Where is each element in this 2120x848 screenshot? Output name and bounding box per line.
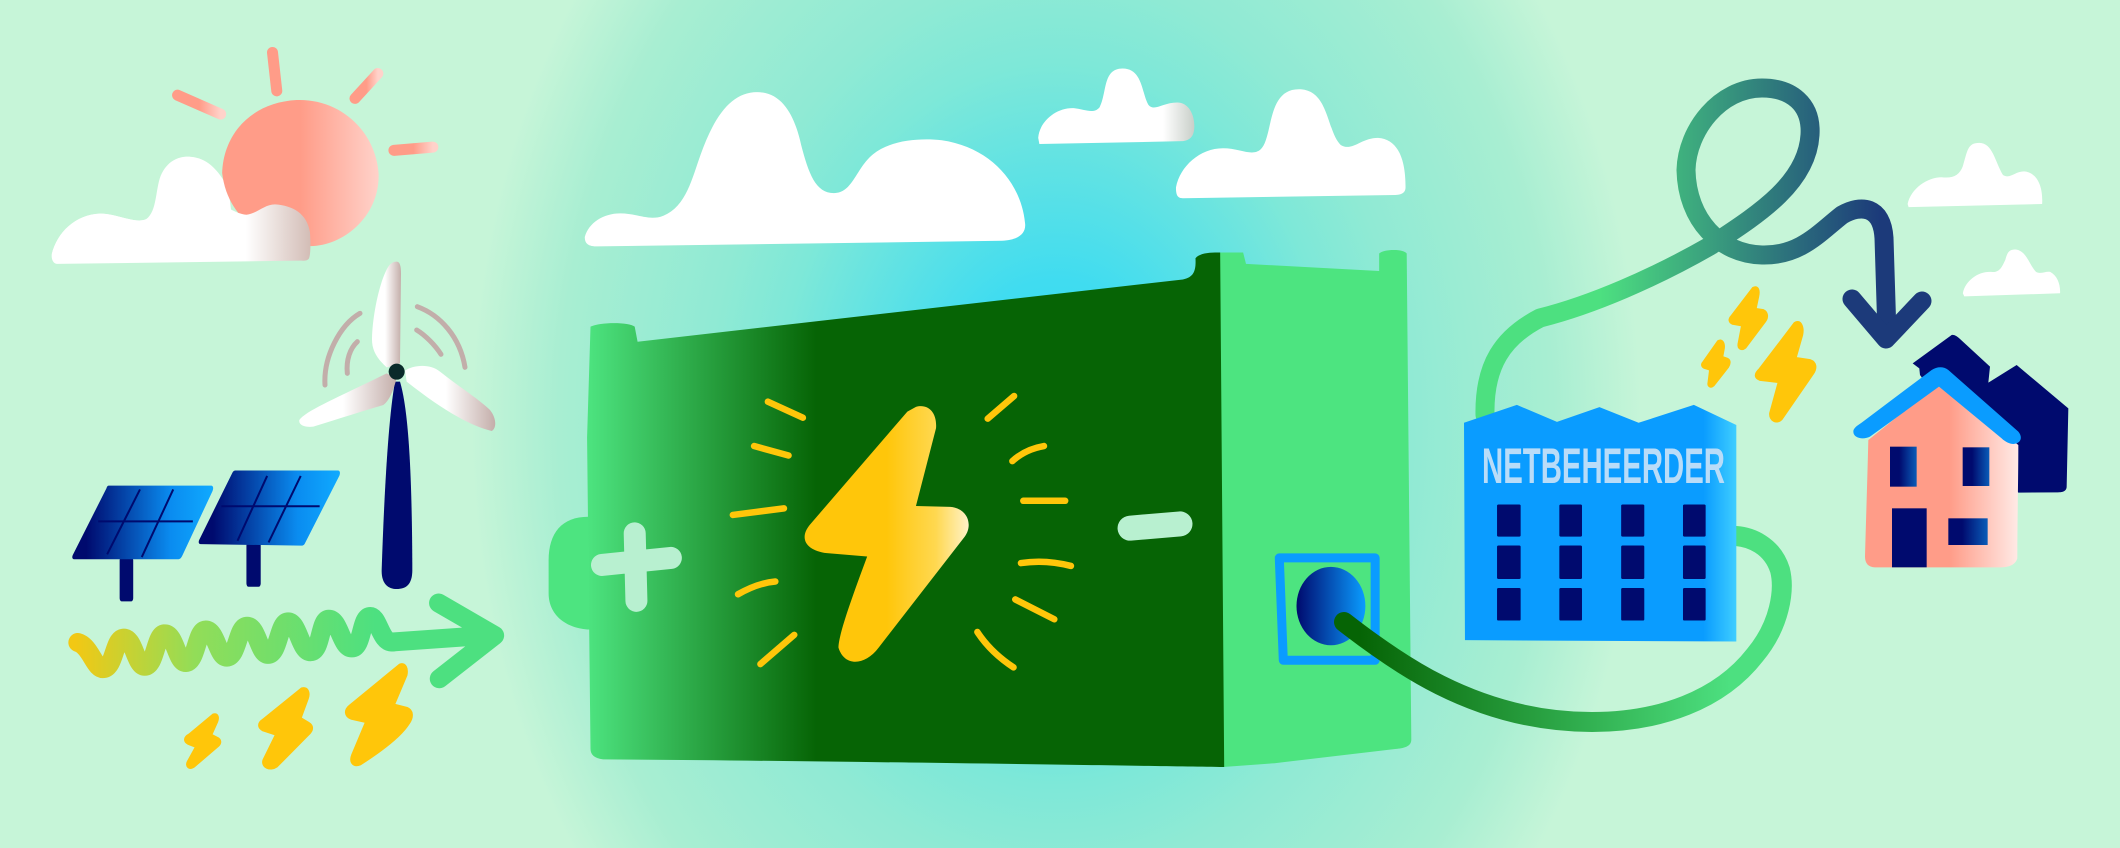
turbine hub [389,364,405,380]
centre section: clouds and battery [549,68,1411,767]
battery front face [587,253,1224,767]
front house [1853,367,2021,567]
large cloud [585,92,1025,246]
plus sign [602,533,671,601]
house roof [1853,367,2021,444]
small cloud [1038,68,1194,144]
power cable from battery to grid operator [1344,536,1782,722]
icon: sun [177,52,433,246]
battery side face [1217,250,1411,767]
medium cloud [1176,89,1406,198]
houses [1853,335,2068,567]
socket frame [1279,558,1375,660]
wavy energy arrow [78,603,495,679]
house windows [1890,447,1917,487]
cloud top right [1908,143,2042,207]
house walls [1865,383,2018,567]
background houses [1913,335,2068,493]
right section: grid operator and clouds [1464,143,2060,642]
cloud behind sun [52,157,236,260]
cloud lower right [1963,250,2060,296]
central lightning bolt [805,406,969,662]
icons: lightning bolts, left [186,665,411,768]
building windows [1497,504,1706,621]
arrowhead [1852,299,1922,339]
icon: wind turbine [299,262,495,589]
plug [1297,567,1365,645]
left section: renewable sources [52,52,495,679]
turbine blades [299,262,495,431]
battery body [549,250,1411,767]
battery terminal [549,517,592,630]
house door [1892,508,1927,567]
minus sign [1130,524,1180,528]
cloud in front of sun [52,204,310,264]
turbine tower [382,382,412,589]
turbine sound arcs [325,307,465,385]
sun disc [222,100,379,246]
spark rays [733,396,1071,667]
looping power line to houses [1485,88,1922,415]
icon: solar panel 1 [72,486,213,601]
label: netbeheerder: NETBEHEERDER [1482,438,1725,494]
sun rays [177,52,433,150]
building: netbeheerder [1464,405,1736,642]
icon: solar panel 2 [199,471,340,587]
lightning bolts, right [1703,288,1815,421]
